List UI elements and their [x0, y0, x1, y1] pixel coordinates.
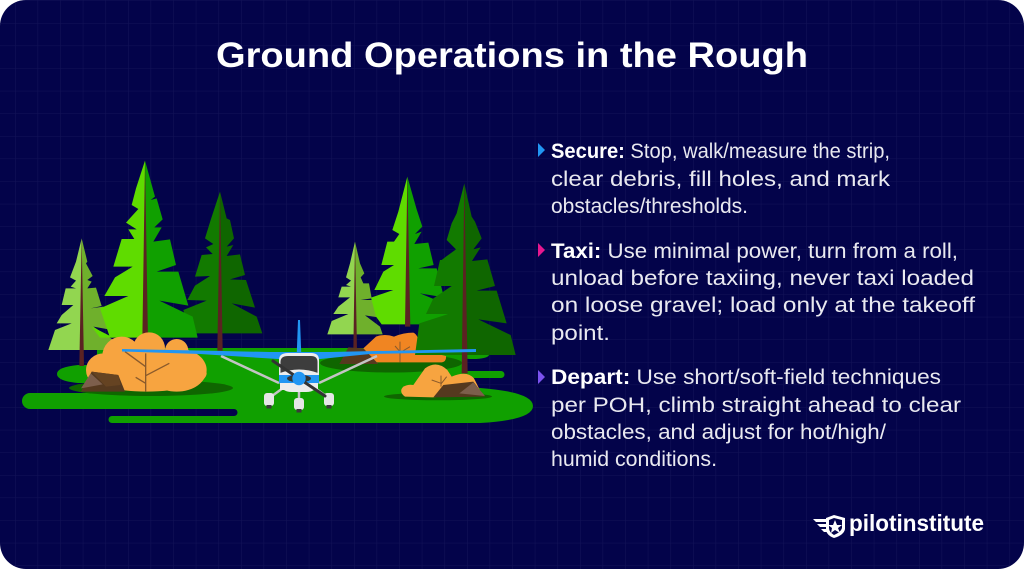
bullet: blue: [538, 143, 545, 157]
text block: Taxi: point.: [551, 322, 610, 345]
fuselage: [279, 353, 319, 392]
logo icon: winged shield: [813, 515, 845, 538]
text block: Depart: Depart: Use short/soft-field techniques: [551, 366, 941, 389]
tree: bright tall: [92, 161, 198, 340]
title: Ground Operations in the Rough: [216, 36, 808, 75]
tree: light small right: [327, 242, 383, 351]
landing gear: [264, 388, 334, 412]
tree: dark back: [183, 192, 262, 351]
tree: dark right: [415, 183, 516, 373]
bullet: purple: [538, 370, 545, 384]
wings: [122, 349, 476, 359]
tail fin: [297, 320, 301, 352]
text block: Taxi: unload before taxiing, never taxi loaded: [551, 267, 974, 290]
ground shadows: [69, 354, 492, 400]
text block: Secure: [538, 140, 891, 218]
text block: Secure: obstacles/thresholds.: [551, 195, 748, 218]
text block: Secure: Secure: Stop, walk/measure the strip,: [551, 140, 890, 163]
text block: Depart: per POH, climb straight ahead to clear: [551, 394, 961, 417]
text block: Depart: [538, 366, 961, 471]
text block: Taxi: on loose gravel; load only at the takeoff: [551, 294, 975, 317]
airplane: [122, 320, 476, 412]
text block: Secure: clear debris, fill holes, and mark: [551, 168, 891, 191]
trees left group: [48, 161, 262, 392]
spinner: [292, 372, 306, 385]
propeller: [273, 361, 325, 396]
bush: dark orange: [339, 333, 446, 364]
text block: Taxi: Taxi: Use minimal power, turn from a roll,: [551, 240, 958, 263]
illustration: forest scene with airplane: [22, 161, 533, 423]
tree: light small: [48, 238, 115, 366]
stripe: [279, 375, 319, 383]
bush: large orange: [81, 332, 207, 392]
bush: small orange: [401, 365, 485, 397]
trees right group: [327, 177, 516, 397]
windshield: [280, 356, 318, 375]
logo: pilotinstitute: pilotinstitute: [849, 510, 984, 536]
text block: Depart: obstacles, and adjust for hot/high/: [551, 421, 886, 444]
text block: Depart: humid conditions.: [551, 448, 717, 471]
ground: [22, 348, 533, 423]
tree: bright right: [371, 177, 448, 327]
text block: Taxi: [538, 240, 975, 345]
struts: [221, 356, 377, 383]
bullet: pink: [538, 243, 545, 257]
